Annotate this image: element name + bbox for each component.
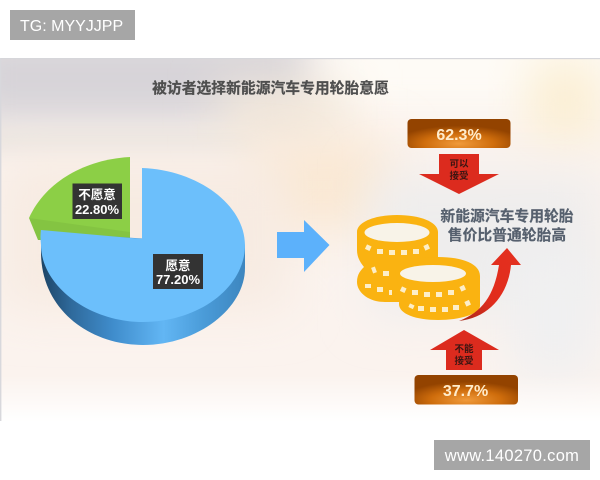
watermark: top left: TG: MYYJJPP [20,18,123,35]
coin stack: left [357,215,440,302]
box: 62.3%: 62.3% [436,127,482,144]
box: 37.7%: 37.7% [443,383,488,400]
arrow: red up, not acceptable: 接受 [454,355,474,367]
label: 不愿意 22.80%: 不愿意 [78,187,116,202]
arrow: red up, not acceptable: 不能 [454,343,474,355]
box: 37.7% [414,375,518,404]
label: 不愿意 22.80% [72,184,122,219]
label: 愿意 77.20% [153,254,203,289]
watermark: bottom right: www.140270.com [444,447,579,465]
arrow: blue right [277,220,330,272]
label: 愿意 77.20%: 愿意 [165,258,191,273]
pie slice: blue 77.2% [40,168,245,345]
background panel [2,59,600,400]
box: 62.3% [408,119,510,148]
text: price note: 售价比普通轮胎高 [448,226,566,244]
watermark: top left [10,10,135,40]
text: price note: 新能源汽车专用轮胎 [440,207,574,225]
pie chart [29,157,245,345]
watermark: bottom right [434,440,590,470]
arrow: red down, acceptable: 接受 [449,170,469,182]
label: 不愿意 22.80%: 22.80% [75,202,119,217]
arrow: red down, acceptable [419,154,499,194]
arrow: red up, not acceptable [430,330,499,370]
pie slice: green 22.8% [29,157,130,240]
icon: coin stacks [357,215,480,320]
title: 被访者选择新能源汽车专用轮胎意愿 [152,79,389,97]
coin stack: right [395,257,480,320]
label: 愿意 77.20%: 77.20% [156,272,200,287]
text: price note [440,207,574,244]
arrow: red down, acceptable: 可以 [449,159,469,170]
arrow: red curved up [459,248,521,321]
